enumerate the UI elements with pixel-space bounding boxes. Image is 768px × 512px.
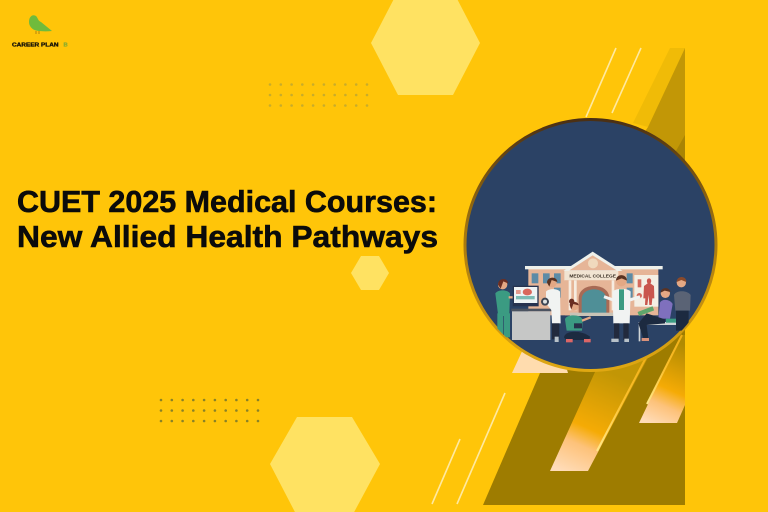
highlight line: left stripe bbox=[597, 350, 650, 451]
decorative olive block: lower right bbox=[483, 330, 685, 505]
line: upper right bbox=[612, 48, 641, 113]
logo: Career Plan B bbox=[12, 15, 68, 49]
hexagon: bottom bbox=[270, 417, 380, 512]
gradient stripe: right bbox=[639, 335, 685, 423]
dot grid: upper bbox=[269, 83, 368, 107]
building bbox=[525, 252, 663, 316]
standing man in grey bbox=[674, 277, 691, 331]
peach triangle bbox=[512, 345, 568, 373]
decorative diagonal shapes: upper right bbox=[586, 48, 685, 200]
line: lower short bbox=[432, 439, 460, 504]
line: upper left bbox=[586, 48, 616, 117]
bench bbox=[638, 318, 676, 342]
hexagon: middle small bbox=[351, 256, 389, 290]
title line 2: New Allied Health Pathways bbox=[17, 220, 438, 254]
computer monitor bbox=[513, 286, 539, 306]
nurse in teal scrubs bbox=[495, 279, 515, 337]
logo wordmark: CAREER PLAN bbox=[12, 43, 58, 49]
logo letter B: B bbox=[64, 43, 68, 49]
desk bbox=[511, 309, 551, 340]
doctor at microscope bbox=[541, 278, 561, 342]
icon: green bird bbox=[29, 15, 52, 34]
dot grid: lower bbox=[160, 399, 259, 422]
gradient stripe: left bbox=[550, 350, 652, 471]
student seated on floor bbox=[564, 299, 591, 342]
highlight line: right stripe bbox=[647, 335, 682, 404]
seated patient bbox=[638, 288, 673, 341]
circle panel: medical college illustration bbox=[465, 120, 716, 370]
circle background bbox=[465, 120, 716, 370]
line: lower long bbox=[457, 393, 505, 504]
anatomy poster bbox=[634, 275, 658, 307]
hexagon: top bbox=[371, 0, 480, 95]
building sign: MEDICAL COLLEGE bbox=[569, 274, 617, 280]
title line 1: CUET 2025 Medical Courses: bbox=[17, 185, 437, 219]
doctor presenting bbox=[604, 275, 640, 342]
title bbox=[17, 185, 438, 254]
